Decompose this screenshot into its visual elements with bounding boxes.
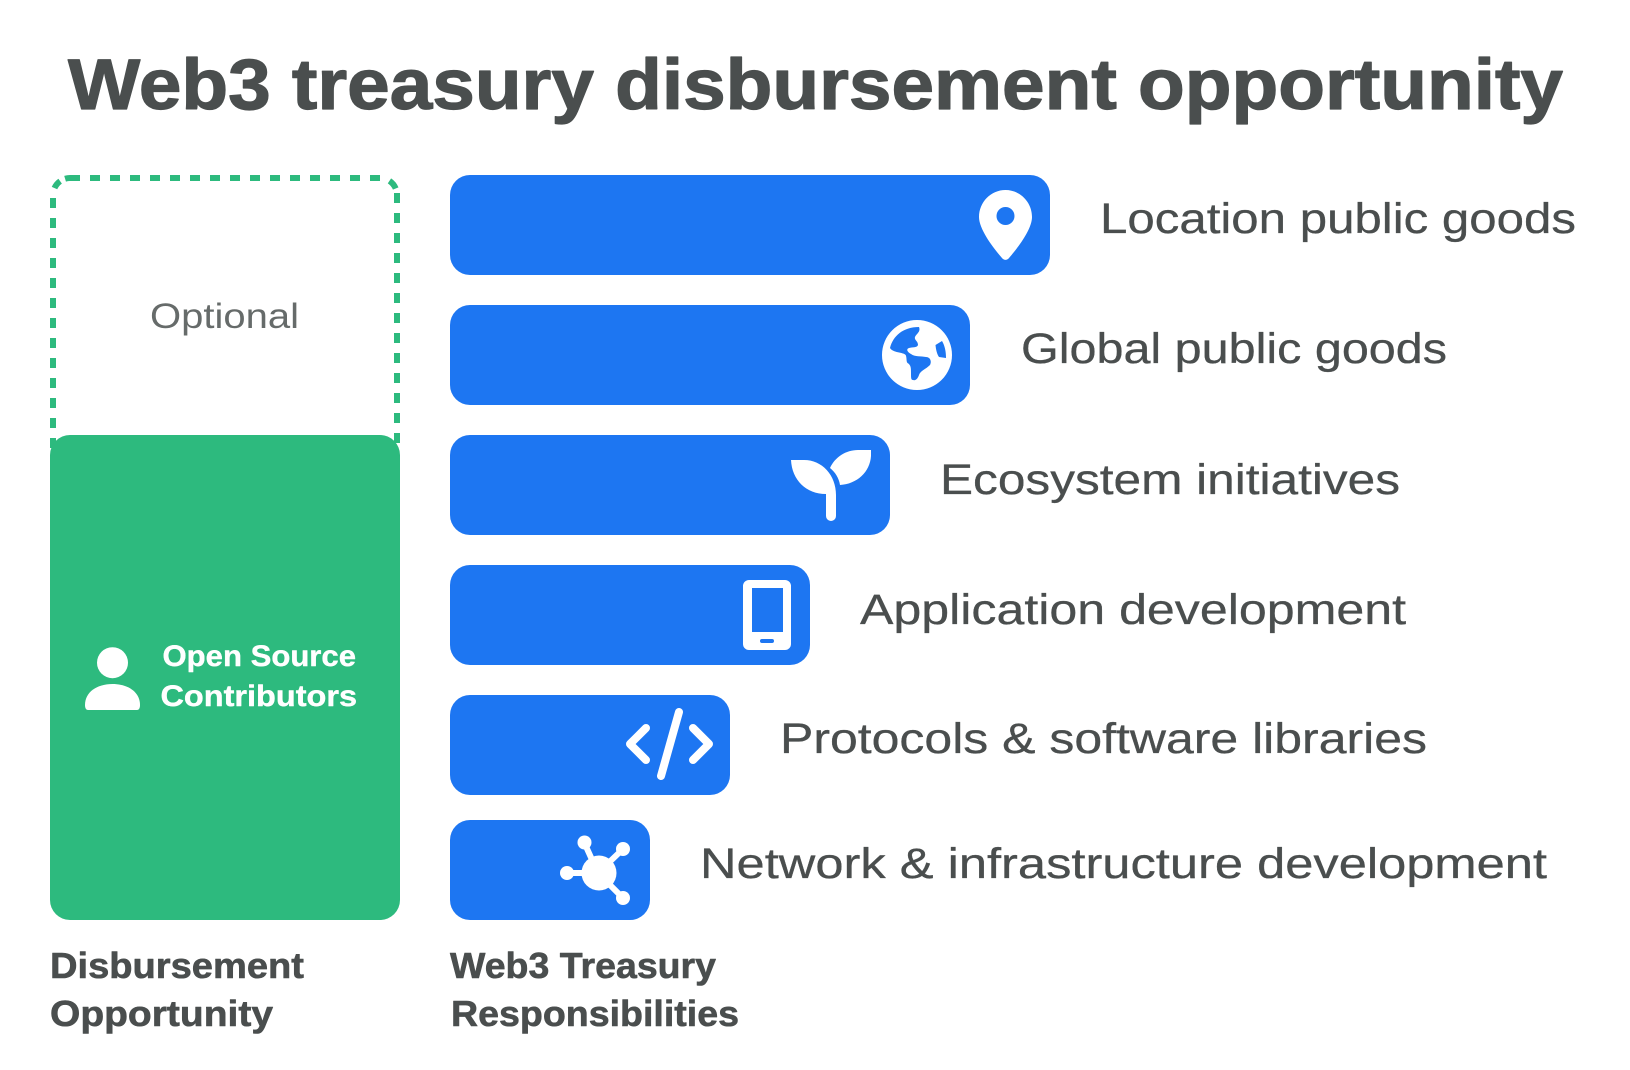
contributors label: Open Source xyxy=(162,640,356,673)
axis caption: web3 treasury responsibilities: Responsibilities xyxy=(451,993,739,1034)
green open source contributors block xyxy=(50,435,400,920)
label: Application development xyxy=(860,586,1406,634)
icon: globe xyxy=(882,320,952,390)
icon: code brackets xyxy=(630,712,709,776)
label: Network & infrastructure development xyxy=(700,840,1547,888)
bar: global public goods xyxy=(450,305,1447,405)
label: Location public goods xyxy=(1100,195,1576,243)
icon: network node xyxy=(560,836,630,905)
panel: disbursement opportunity column xyxy=(50,178,400,920)
axis caption: disbursement opportunity xyxy=(50,945,304,1034)
contributors label xyxy=(160,640,357,713)
optional area dashed box xyxy=(53,178,397,450)
bar: location public goods xyxy=(450,175,1576,275)
icon: person xyxy=(85,647,140,710)
axis caption: web3 treasury responsibilities xyxy=(450,945,739,1034)
label: Protocols & software libraries xyxy=(780,715,1427,763)
bar: ecosystem initiatives xyxy=(450,435,1400,535)
icon: map pin xyxy=(979,190,1032,260)
optional label: Optional xyxy=(150,297,299,336)
contributors label: Contributors xyxy=(160,680,357,713)
axis caption: disbursement opportunity: Disbursement xyxy=(50,945,304,986)
axis caption: web3 treasury responsibilities: Web3 Treasury xyxy=(450,945,716,986)
icon: phone xyxy=(743,580,791,650)
axis caption: disbursement opportunity: Opportunity xyxy=(50,993,273,1034)
bar: application development xyxy=(450,565,1406,665)
bar: network and infrastructure development xyxy=(450,820,1547,920)
title: Web3 treasury disbursement opportunity xyxy=(68,46,1564,125)
label: Ecosystem initiatives xyxy=(940,456,1400,504)
bar: protocols and software libraries xyxy=(450,695,1427,795)
icon: sprout xyxy=(791,450,871,521)
label: Global public goods xyxy=(1021,325,1447,373)
